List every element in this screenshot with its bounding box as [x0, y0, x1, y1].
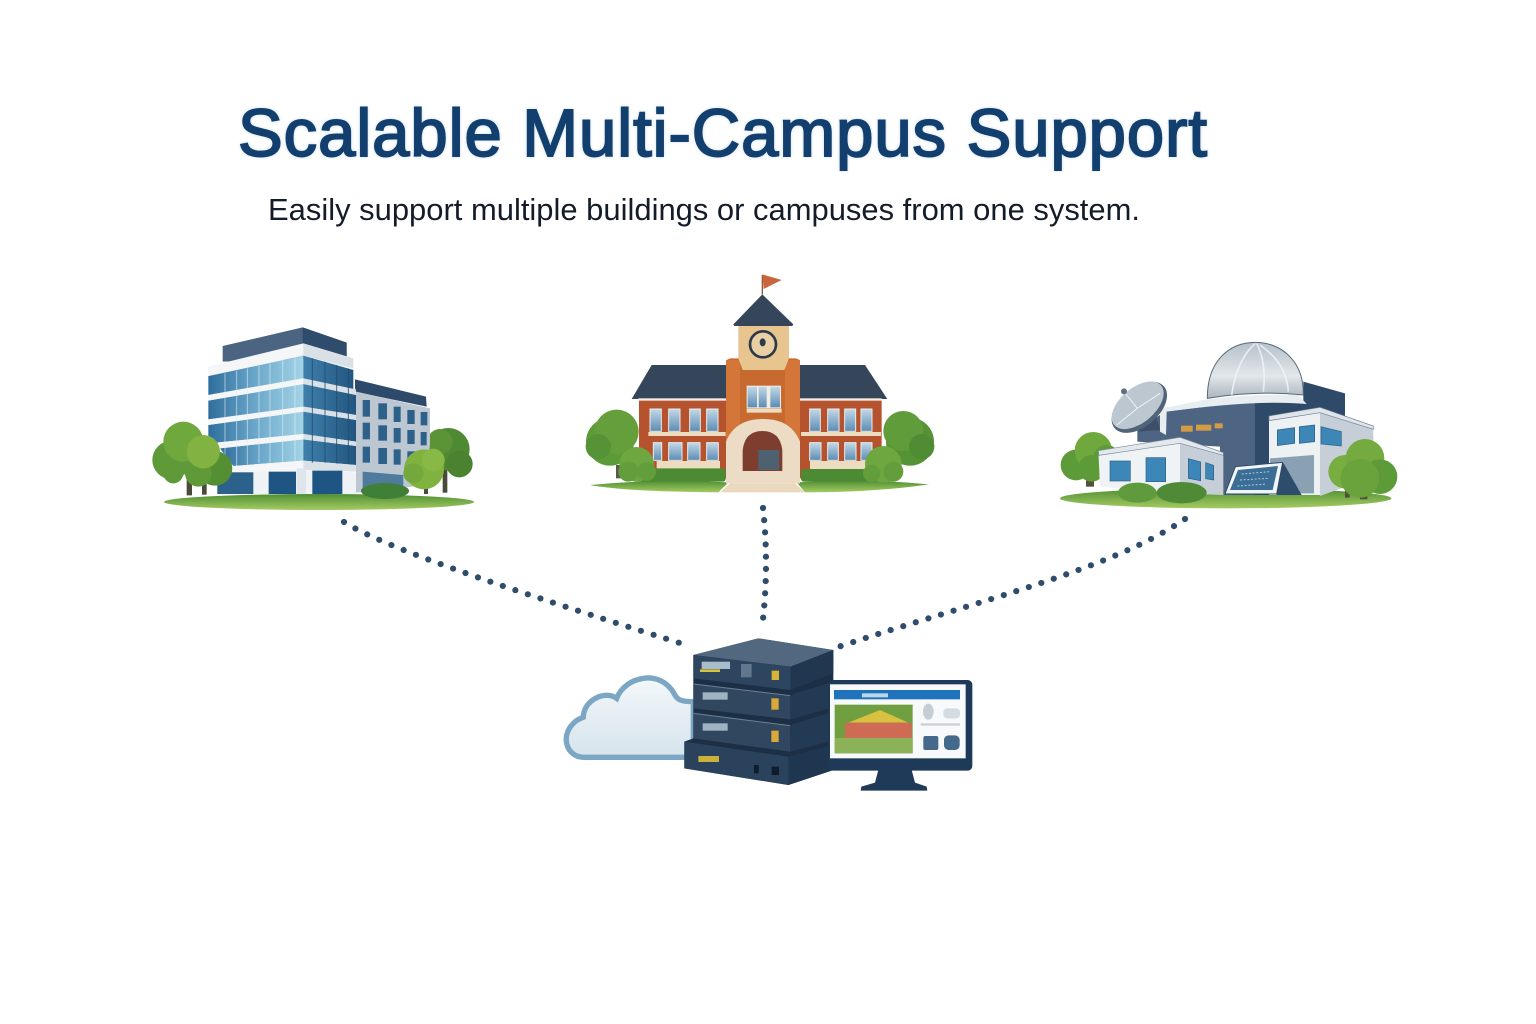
server unit 2: [693, 683, 828, 719]
central tower: [726, 358, 800, 482]
screen widgets: [921, 704, 960, 750]
icon: school building campus: [586, 274, 934, 492]
wing walls: [639, 400, 727, 478]
dotted connector: research campus to server: [838, 519, 1185, 647]
white floor bands: [208, 343, 353, 472]
wing roof and wall: [355, 379, 427, 407]
dark central building: [1137, 401, 1255, 495]
cloud: [566, 678, 693, 757]
monitor: [828, 680, 972, 791]
dotted connector: school to server: [763, 508, 766, 619]
right white building: [1269, 407, 1320, 495]
entrance arch: [726, 419, 800, 483]
server unit 3: [693, 713, 828, 752]
dome collar: [1160, 395, 1307, 435]
icon: research campus with dome: [1060, 342, 1397, 508]
school lawns: [590, 481, 728, 492]
screen photo: [835, 705, 913, 753]
ground floor: [217, 468, 356, 494]
solar panel: [1225, 462, 1302, 495]
server unit 4: [684, 742, 833, 785]
stack backing: [684, 638, 833, 785]
bushes: [618, 446, 903, 483]
lawn: [164, 494, 474, 510]
tower window: [747, 386, 782, 413]
wing roofs: [632, 365, 727, 399]
left white building: [1098, 437, 1180, 493]
lit windows: [1181, 423, 1223, 432]
icon: office building campus: [152, 327, 474, 510]
wing windows: [363, 400, 427, 489]
left tree: [1061, 432, 1120, 487]
wing windows: [650, 409, 872, 460]
flag: [760, 275, 764, 294]
glass facade: [208, 356, 356, 466]
path: [720, 483, 805, 492]
satellite dish: [1102, 372, 1177, 443]
back trees: [586, 410, 934, 478]
dotted connector: office to server: [344, 522, 683, 644]
mullions: [225, 357, 295, 467]
clock: [750, 331, 776, 357]
office roof: [223, 327, 347, 362]
research lawn: [1060, 488, 1391, 508]
rear trees: [187, 428, 473, 495]
hedge and front tree: [361, 449, 445, 499]
server unit 1: [693, 638, 833, 690]
tower roof: [733, 294, 793, 326]
stone bands: [648, 432, 881, 471]
subtitle: Easily support multiple buildings or campuses from one system.: [268, 192, 1140, 227]
bushes: [1118, 482, 1207, 503]
left trees: [152, 422, 232, 487]
title: Scalable Multi-Campus Support: [238, 96, 1207, 171]
clock section: [738, 326, 789, 370]
right tree: [1328, 439, 1397, 499]
icon: cloud, server stack and monitor: [566, 638, 972, 791]
dome: [1207, 342, 1303, 398]
